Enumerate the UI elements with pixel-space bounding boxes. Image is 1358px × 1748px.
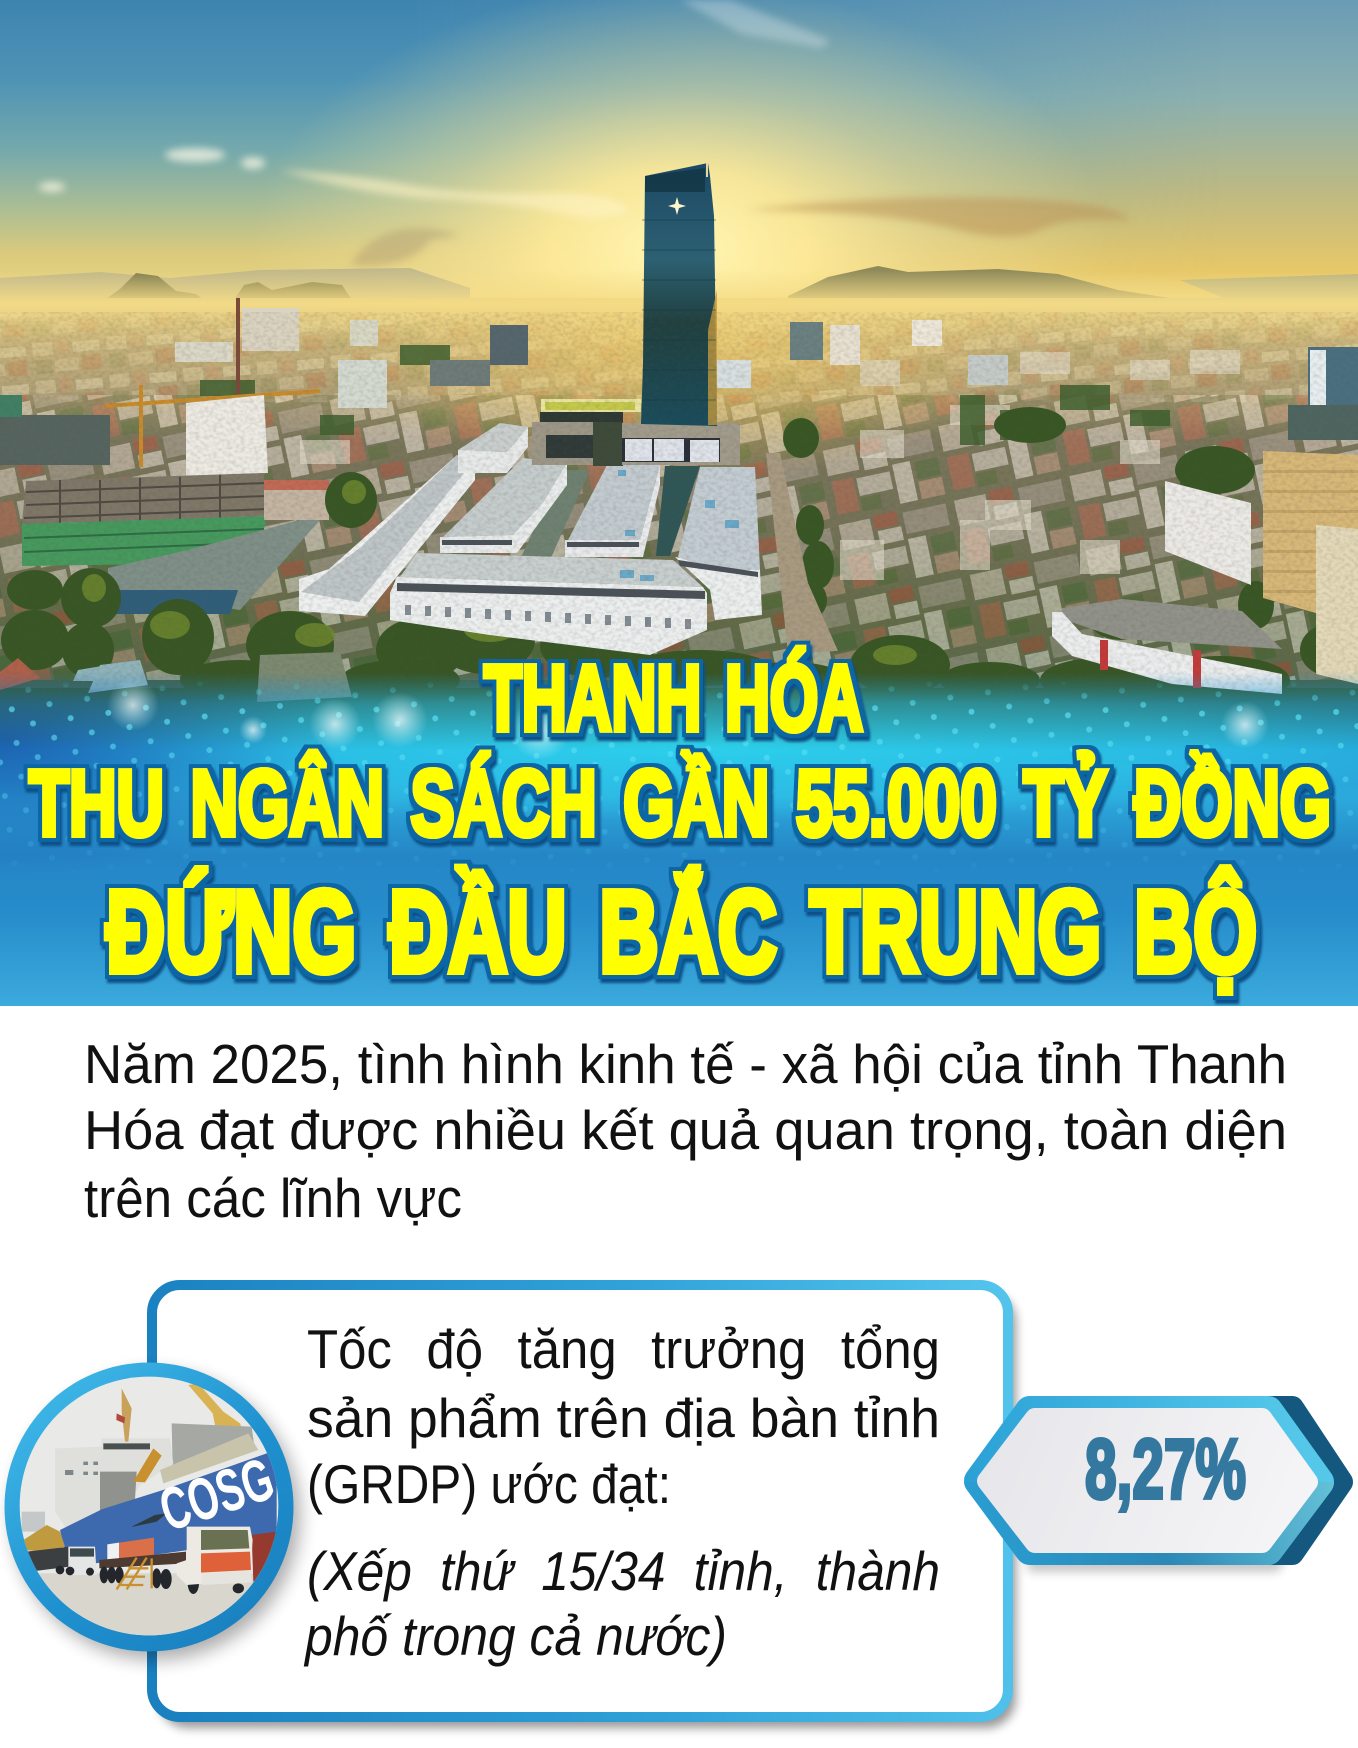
photo ring [4, 1362, 300, 1660]
card description text [303, 1318, 940, 1667]
port scene [17, 1375, 283, 1640]
sky with sun glow [0, 0, 1358, 298]
badge value: 8,27% [1085, 1422, 1246, 1516]
city base and texture [0, 270, 1358, 760]
badge hexagon [979, 1408, 1341, 1572]
intro paragraph: Hóa đạt được nhiều kết quả quan trọng, toàn diện [84, 1099, 1287, 1161]
Honda showroom [1052, 599, 1282, 694]
intro paragraph [84, 1033, 1287, 1229]
port scene: COSG [152, 1445, 282, 1544]
photo texture [0, 312, 1358, 762]
card description text: (Xếp thứ 15/34 tỉnh, thành [307, 1540, 940, 1602]
card description text: (GRDP) ước đạt: [307, 1453, 671, 1515]
foreground trees [0, 407, 1358, 763]
card description text: Tốc độ tăng trưởng tổng [307, 1318, 940, 1380]
card description text: sản phẩm trên địa bàn tỉnh [307, 1387, 940, 1449]
distant mountains [0, 266, 1358, 318]
mid-ground towers [0, 298, 1358, 467]
dot pattern [0, 682, 1358, 860]
left buildings [22, 395, 329, 614]
title banner [0, 646, 1358, 1006]
hero photo: Thanh Hoa city at sunset [0, 0, 1358, 763]
tower and podium [532, 163, 740, 466]
right buildings [1165, 451, 1358, 684]
title line 1: THANH HÓA [484, 646, 863, 750]
card description text: phố trong cả nước) [303, 1605, 727, 1667]
intro paragraph: trên các lĩnh vực [84, 1167, 462, 1229]
value badge: 8,27% [979, 1408, 1341, 1572]
circular photo: cargo ship and truck at port [4, 1362, 300, 1660]
banner background [0, 660, 1358, 1006]
pale terraced blocks [299, 423, 762, 655]
card frame [152, 1285, 1016, 1728]
intro paragraph: Năm 2025, tình hình kinh tế - xã hội của tỉnh Thanh [84, 1033, 1287, 1095]
GRDP card [152, 1285, 1016, 1728]
road [766, 453, 838, 653]
light sparks [107, 679, 1269, 760]
